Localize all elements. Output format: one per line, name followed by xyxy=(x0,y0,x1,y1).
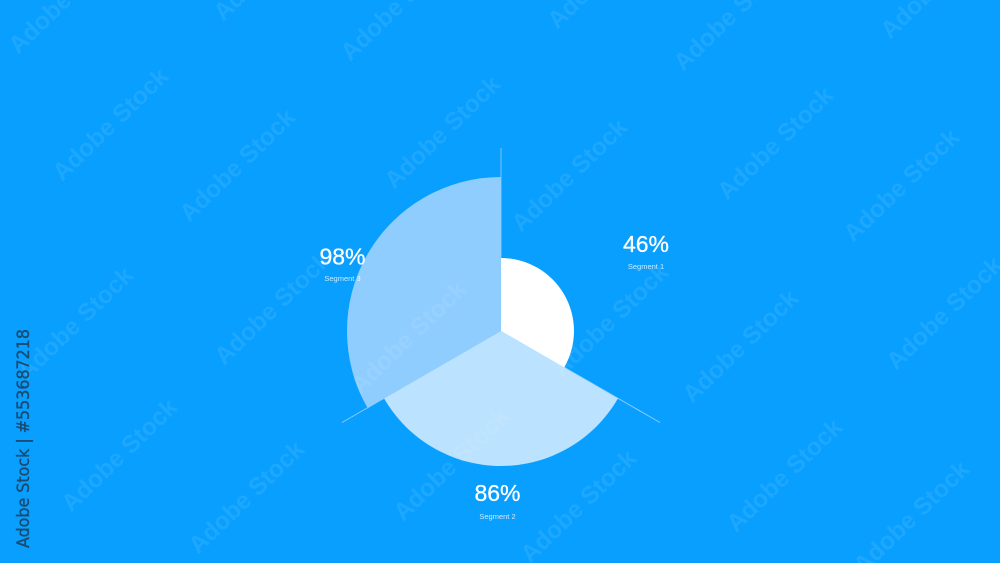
label: 46% Segment 1: Segment 1 xyxy=(628,262,664,271)
label: 86% Segment 2 xyxy=(474,480,521,521)
stock watermarks: Adobe Stock xyxy=(389,403,515,526)
stock watermarks: Adobe Stock xyxy=(184,436,310,559)
stock watermarks: Adobe Stock xyxy=(548,259,674,382)
stock id side text: Adobe Stock | #553687218 xyxy=(14,329,34,548)
stock watermarks: Adobe Stock xyxy=(678,285,804,408)
radial chart xyxy=(342,148,660,466)
stock watermarks: Adobe Stock xyxy=(175,104,301,227)
stock watermarks: Adobe Stock xyxy=(57,394,183,517)
segment 1 wedge xyxy=(501,258,574,368)
label: 86% Segment 2: Segment 2 xyxy=(479,512,516,521)
stock watermarks: Adobe Stock xyxy=(722,414,848,537)
stock watermarks: Adobe Stock xyxy=(839,124,965,247)
stock watermarks: Adobe Stock xyxy=(210,247,336,370)
stock watermarks: Adobe Stock xyxy=(380,71,506,194)
axis line: lower right xyxy=(501,331,660,422)
segment 3 wedge xyxy=(347,177,501,408)
label: 98% Segment 3: Segment 3 xyxy=(324,274,361,283)
axis line: top xyxy=(500,148,502,331)
segment 2 wedge xyxy=(384,331,618,466)
label: 46% Segment 1: 46% xyxy=(623,231,669,257)
axis line: lower left xyxy=(342,331,501,422)
stock watermarks: Adobe Stock xyxy=(346,276,472,399)
label: 86% Segment 2: 86% xyxy=(474,480,521,506)
stock watermarks: Adobe Stock xyxy=(48,63,174,186)
stock watermarks: Adobe Stock xyxy=(507,114,633,237)
label: 46% Segment 1 xyxy=(623,231,669,271)
label: 98% Segment 3: 98% xyxy=(319,244,366,270)
label: 98% Segment 3 xyxy=(319,244,366,283)
stock watermarks: Adobe Stock xyxy=(13,262,139,385)
stock watermarks: Adobe Stock xyxy=(713,82,839,205)
